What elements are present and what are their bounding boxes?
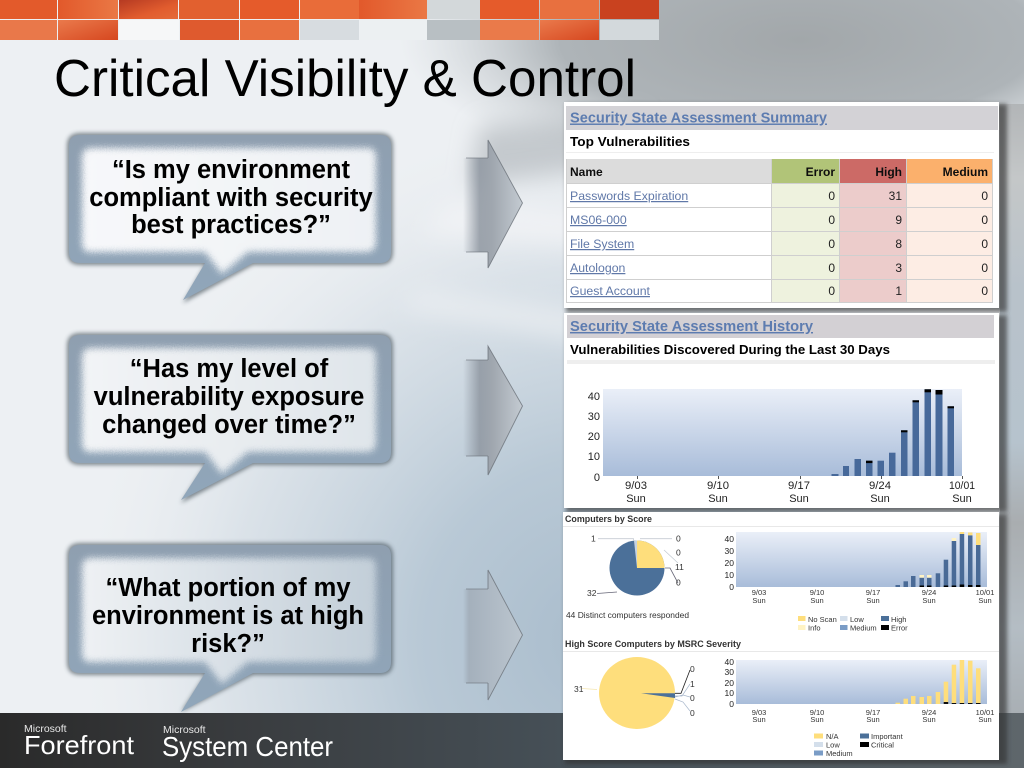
bar chart: severity history: 40 (725, 657, 734, 667)
bar chart: vulnerabilities over 30 days: 10/01 (949, 480, 975, 492)
footer band: Microsoft (163, 724, 206, 736)
arrow: to history chart (463, 346, 522, 475)
callout: compliance question: compliant with security (89, 184, 374, 212)
callout: exposure question: changed over time?” (102, 411, 356, 439)
vulnerabilities table: 3 (895, 261, 902, 275)
pie chart: computers by score: 0 (676, 578, 681, 588)
footer band: System Center (162, 731, 333, 762)
bar chart: score history: Sun (922, 596, 936, 605)
panel: security state assessment summary: Security State Assessment Summary (570, 110, 827, 126)
vulnerabilities table: 0 (828, 261, 835, 275)
bar chart: vulnerabilities over 30 days: 30 (588, 411, 600, 423)
bar chart: vulnerabilities over 30 days: 9/03 (625, 480, 647, 492)
callout: compliance question (67, 133, 393, 303)
bar chart: score history (725, 532, 994, 605)
heading: computers by score: Computers by Score (565, 514, 652, 524)
vulnerabilities table: Error (806, 165, 835, 179)
callout: exposure question: “Has my level of (130, 355, 329, 383)
bar chart: severity history (725, 657, 994, 724)
bar chart: severity history: Sun (866, 715, 880, 724)
panel: security state assessment summary: Top Vulnerabilities (570, 134, 690, 149)
vulnerabilities table: 0 (828, 189, 835, 203)
callout: high risk question: environment is at high (92, 602, 364, 630)
vulnerabilities table: Autologon (570, 261, 626, 275)
bar chart: score history: Sun (810, 596, 824, 605)
vulnerabilities table: 0 (981, 237, 988, 251)
bar chart: vulnerabilities over 30 days: Sun (789, 493, 809, 505)
bar chart: vulnerabilities over 30 days: 0 (594, 472, 600, 484)
bar chart: vulnerabilities over 30 days: 9/10 (707, 480, 729, 492)
panel: security state assessment history: Security State Assessment History (570, 319, 813, 335)
arrow: to summary table (463, 140, 522, 268)
bar chart: vulnerabilities over 30 days: 10 (588, 451, 600, 463)
arrow: to score charts (463, 570, 522, 700)
bar chart: score history: Sun (752, 596, 766, 605)
bar chart: severity history: Sun (978, 715, 992, 724)
vulnerabilities table: File System (570, 237, 634, 251)
bar chart: severity history: 20 (725, 678, 734, 688)
bar chart: vulnerabilities over 30 days: Sun (626, 493, 646, 505)
pie chart: MSRC severity: 0 (690, 708, 695, 718)
vulnerabilities table: 0 (981, 284, 988, 298)
legend: severity: N/A (826, 732, 839, 741)
bar chart: score history: 10 (725, 570, 734, 580)
pie chart: MSRC severity: 31 (574, 684, 584, 694)
footer band: Microsoft (24, 723, 67, 735)
legend: score: Low (850, 615, 864, 624)
bar chart: severity history: 30 (725, 667, 734, 677)
panel: security state assessment summary (564, 102, 1007, 312)
bar chart: vulnerabilities over 30 days: 9/24 (869, 480, 891, 492)
bar chart: score history: 0 (729, 582, 734, 592)
bar chart: score history: 9/10 (810, 588, 824, 597)
legend: severity (814, 732, 904, 758)
vulnerabilities table: Medium (943, 165, 988, 179)
note: distinct computers: 44 Distinct computers responded (566, 610, 689, 620)
legend: score: Info (808, 624, 821, 632)
bar chart: severity history: 9/17 (866, 708, 880, 717)
vulnerabilities table: Name (570, 165, 603, 179)
title: Critical Visibility & Control (54, 50, 636, 108)
vulnerabilities table: 0 (981, 213, 988, 227)
footer band: Forefront (24, 730, 135, 760)
vulnerabilities table: 0 (828, 213, 835, 227)
legend: score: Error (891, 624, 908, 632)
bar chart: vulnerabilities over 30 days: 20 (588, 431, 600, 443)
pie chart: computers by score: 0 (676, 548, 681, 558)
bar chart: vulnerabilities over 30 days: Sun (870, 493, 890, 505)
bar chart: severity history: Sun (810, 715, 824, 724)
bar chart: severity history: 10 (725, 688, 734, 698)
panel: computers by score and MSRC severity (563, 512, 1007, 764)
top tile strip (0, 0, 659, 40)
bar chart: score history: 10/01 (976, 588, 994, 597)
panel: security state assessment history: Vulnerabilities Discovered During the Last 30 Days (570, 342, 890, 357)
bar chart: severity history: Sun (752, 715, 766, 724)
pie chart: MSRC severity (574, 657, 695, 729)
vulnerabilities table: 8 (895, 237, 902, 251)
bar chart: score history: 40 (725, 534, 734, 544)
bar chart: vulnerabilities over 30 days: 40 (588, 391, 600, 403)
bar chart: score history: 30 (725, 546, 734, 556)
bar chart: vulnerabilities over 30 days: Sun (708, 493, 728, 505)
legend: severity: Critical (871, 740, 894, 750)
pie chart: computers by score: 11 (675, 562, 684, 572)
pie chart: computers by score: 0 (676, 534, 681, 544)
pie chart: computers by score: 32 (587, 588, 597, 598)
legend: severity: Important (871, 732, 904, 741)
pie chart: MSRC severity: 1 (690, 679, 695, 689)
vulnerabilities table: 0 (981, 189, 988, 203)
bar chart: score history: 9/24 (922, 588, 936, 597)
legend: score (798, 615, 908, 632)
vulnerabilities table: 31 (889, 189, 902, 203)
vulnerabilities table: 0 (828, 237, 835, 251)
bar chart: score history: Sun (978, 596, 992, 605)
pie chart: MSRC severity: 0 (690, 664, 695, 674)
bar chart: vulnerabilities over 30 days (588, 389, 975, 505)
legend: score: No Scan (808, 615, 837, 624)
callout: compliance question: best practices?” (131, 211, 331, 239)
legend: severity: Low (826, 740, 840, 750)
vulnerabilities table: 0 (828, 284, 835, 298)
bar chart: severity history: 10/01 (976, 708, 994, 717)
bar chart: severity history: Sun (922, 715, 936, 724)
vulnerabilities table: 1 (895, 284, 902, 298)
bar chart: score history: 9/17 (866, 588, 880, 597)
vulnerabilities table (566, 159, 992, 303)
callout: high risk question (67, 543, 393, 712)
vulnerabilities table: High (875, 165, 902, 179)
vulnerabilities table: 0 (981, 261, 988, 275)
legend: severity: Medium (826, 749, 853, 758)
bar chart: severity history: 0 (729, 699, 734, 709)
bar chart: score history: 20 (725, 558, 734, 568)
footer band (0, 713, 1024, 768)
callout: exposure question: vulnerability exposure (94, 383, 364, 411)
bar chart: severity history: 9/24 (922, 708, 936, 717)
callout: high risk question: “What portion of my (105, 574, 351, 602)
vulnerabilities table: Guest Account (570, 284, 651, 298)
heading: high score computers: High Score Computers by MSRC Severity (565, 639, 741, 649)
callout: exposure question (67, 333, 393, 503)
bar chart: score history: 9/03 (752, 588, 766, 597)
vulnerabilities table: 9 (895, 213, 902, 227)
callout: high risk question: risk?” (191, 630, 265, 658)
bar chart: severity history: 9/03 (752, 708, 766, 717)
panel: security state assessment history (564, 313, 1007, 512)
legend: score: High (891, 615, 906, 624)
pie chart: computers by score (587, 534, 684, 598)
bar chart: vulnerabilities over 30 days: Sun (952, 493, 972, 505)
legend: score: Medium (850, 624, 877, 632)
vulnerabilities table: Passwords Expiration (570, 189, 688, 203)
pie chart: computers by score: 1 (591, 534, 596, 544)
bar chart: severity history: 9/10 (810, 708, 824, 717)
vulnerabilities table: MS06-000 (570, 213, 627, 227)
bar chart: vulnerabilities over 30 days: 9/17 (788, 480, 810, 492)
bar chart: score history: Sun (866, 596, 880, 605)
pie chart: MSRC severity: 0 (690, 693, 695, 703)
callout: compliance question: “Is my environment (112, 156, 351, 184)
